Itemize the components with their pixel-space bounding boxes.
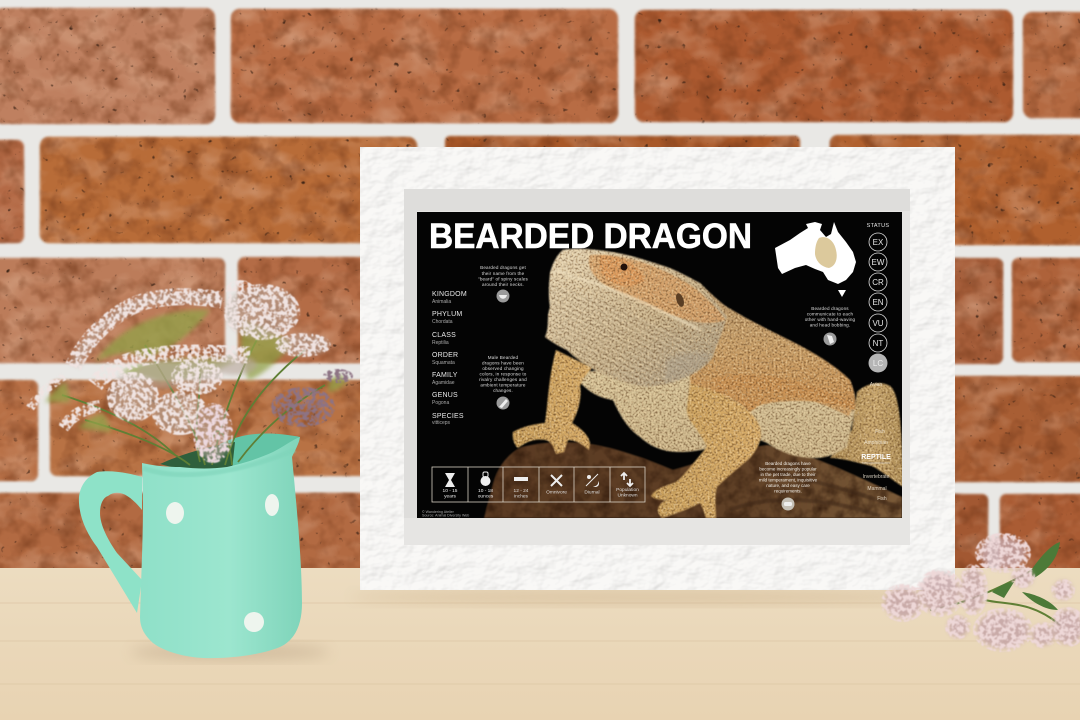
fact: communication: communicate to each [807, 312, 854, 316]
stats row [432, 467, 645, 502]
stat: lifespan [443, 473, 458, 500]
fact: popular pet: mild temperament, inquisitive [759, 478, 818, 482]
taxonomy list: Pogona [432, 400, 449, 406]
rock [484, 442, 902, 518]
icon: brush [496, 396, 510, 410]
active status: LC [868, 354, 888, 372]
taxonomy list: Animalia [432, 299, 451, 305]
conservation status scale [867, 223, 889, 372]
fact: changing colors: ambient temperature [480, 382, 526, 388]
fact: beard name [478, 265, 528, 302]
fact: changing colors: Male Bearded [488, 355, 518, 360]
fact: beard name: their name from the [482, 271, 525, 276]
sprig leaves [992, 542, 1060, 610]
fact: popular pet: requirements. [774, 488, 802, 494]
icon: hand [824, 332, 836, 346]
jug body [140, 437, 302, 658]
front left leg [513, 350, 592, 454]
fact: changing colors [479, 355, 527, 410]
animal class list: Avian [870, 382, 882, 388]
taxonomy list: CLASS [432, 332, 456, 339]
fact: popular pet: nature, and easy care [766, 483, 810, 488]
fact: changing colors: colors, in response to [480, 372, 527, 376]
stat: activity [584, 474, 600, 496]
icon: beard [496, 290, 510, 302]
stat: population: Population [616, 487, 639, 493]
fact: changing colors: observed changing [482, 366, 524, 371]
conservation status scale: CR [872, 278, 884, 287]
stat: population: Unknown [618, 492, 638, 498]
stat: weight [478, 472, 494, 500]
fact: beard name: "beard" of spiny scales [478, 276, 528, 282]
map of Australia with range [775, 222, 856, 297]
animal class list: Invertebrate [863, 474, 890, 480]
poster: bearded dragon infographic [417, 212, 903, 518]
conservation status scale: EW [872, 258, 885, 267]
eye [620, 264, 628, 270]
taxonomy list: FAMILY [432, 372, 458, 379]
taxonomy list: vitticeps [432, 420, 451, 426]
animal class list: Fish [877, 496, 887, 502]
head and beard [545, 249, 727, 387]
stat: lifespan: 10 - 15 [443, 488, 458, 494]
belly [572, 370, 856, 458]
white textured picture frame [360, 147, 955, 590]
title: BEARDED DRAGON [429, 216, 752, 256]
stat: diet: Omnivore [546, 490, 567, 496]
animal class list [863, 382, 890, 502]
taxonomy list: GENUS [432, 392, 458, 399]
stat: length: 12 - 24 [514, 488, 529, 494]
animal class list: Amphibian [864, 440, 888, 446]
taxonomy list: Agamidae [432, 380, 455, 386]
conservation status scale: STATUS [867, 223, 889, 229]
jug handle [79, 471, 142, 613]
stat: length [514, 477, 529, 500]
stat: activity: Diurnal [584, 490, 600, 496]
active status: LC: LC [873, 359, 883, 368]
conservation status scale: EX [873, 238, 884, 247]
blossoms [30, 280, 331, 463]
taxonomy list: Reptilia [432, 340, 449, 346]
stat: lifespan: years [444, 494, 456, 500]
icon: heart [782, 498, 794, 510]
back and flank [690, 283, 855, 412]
taxonomy list: ORDER [432, 352, 458, 359]
stat: population [616, 473, 639, 498]
stat: weight: ounces [478, 494, 494, 500]
mat board [404, 189, 910, 545]
stems [62, 330, 325, 465]
ceramic jug with polka dots [79, 437, 302, 658]
front right leg [651, 383, 761, 518]
taxonomy list [432, 291, 467, 426]
stat: diet [546, 475, 567, 496]
highlighted class: reptile: REPTILE [861, 454, 891, 461]
animal class list: Fish [875, 429, 885, 435]
fact: popular pet: become increasingly popular [759, 466, 817, 472]
stat: length: inches [514, 494, 529, 500]
hind leg and tail [830, 383, 903, 487]
conservation status scale: EN [872, 298, 884, 307]
bearded dragon photo [513, 249, 903, 518]
stat: weight: 10 - 18 [478, 488, 493, 494]
sprig of pink flowers on table [881, 533, 1080, 652]
fact: popular pet: in the pet trade, due to their [760, 472, 816, 477]
wooden table [0, 568, 1080, 720]
conservation status scale: VU [872, 319, 884, 328]
fact: communication: Bearded dragons [811, 306, 849, 311]
blossom underlay [75, 286, 329, 461]
fact: changing colors: rivalry challenges and [479, 377, 527, 382]
pink flower bouquet [30, 280, 353, 465]
fact: changing colors: dragons have been [482, 360, 524, 366]
taxonomy list: Squamata [432, 360, 455, 366]
purple blossoms [271, 369, 353, 427]
taxonomy list: KINGDOM [432, 291, 467, 298]
fact: changing colors: changes. [493, 388, 513, 393]
fact: beard name: around their necks. [482, 282, 524, 287]
conservation status scale: NT [873, 339, 883, 348]
head top orange scales [589, 255, 726, 323]
credit [422, 510, 469, 518]
green umbel cones [45, 310, 348, 432]
fact: communication [805, 306, 856, 346]
fact: popular pet: Bearded dragons have [765, 461, 811, 466]
beard spines [550, 285, 694, 385]
fact: popular pet [759, 461, 818, 510]
taxonomy list: SPECIES [432, 413, 464, 420]
animal class list: Mammal [867, 486, 887, 492]
ear opening [676, 293, 684, 307]
credit: Source: Animal Diversity Web [422, 514, 469, 518]
credit: © Wandering Atelier [422, 510, 455, 514]
jug back rim and interior [160, 433, 300, 472]
brick wall [0, 0, 1080, 575]
taxonomy list: PHYLUM [432, 311, 462, 318]
taxonomy list: Chordata [432, 319, 453, 325]
fact: beard name: Bearded dragons get [480, 265, 526, 270]
fact: communication: and head bobbing. [810, 322, 850, 328]
fact: communication: other with hand-waving [805, 317, 856, 322]
